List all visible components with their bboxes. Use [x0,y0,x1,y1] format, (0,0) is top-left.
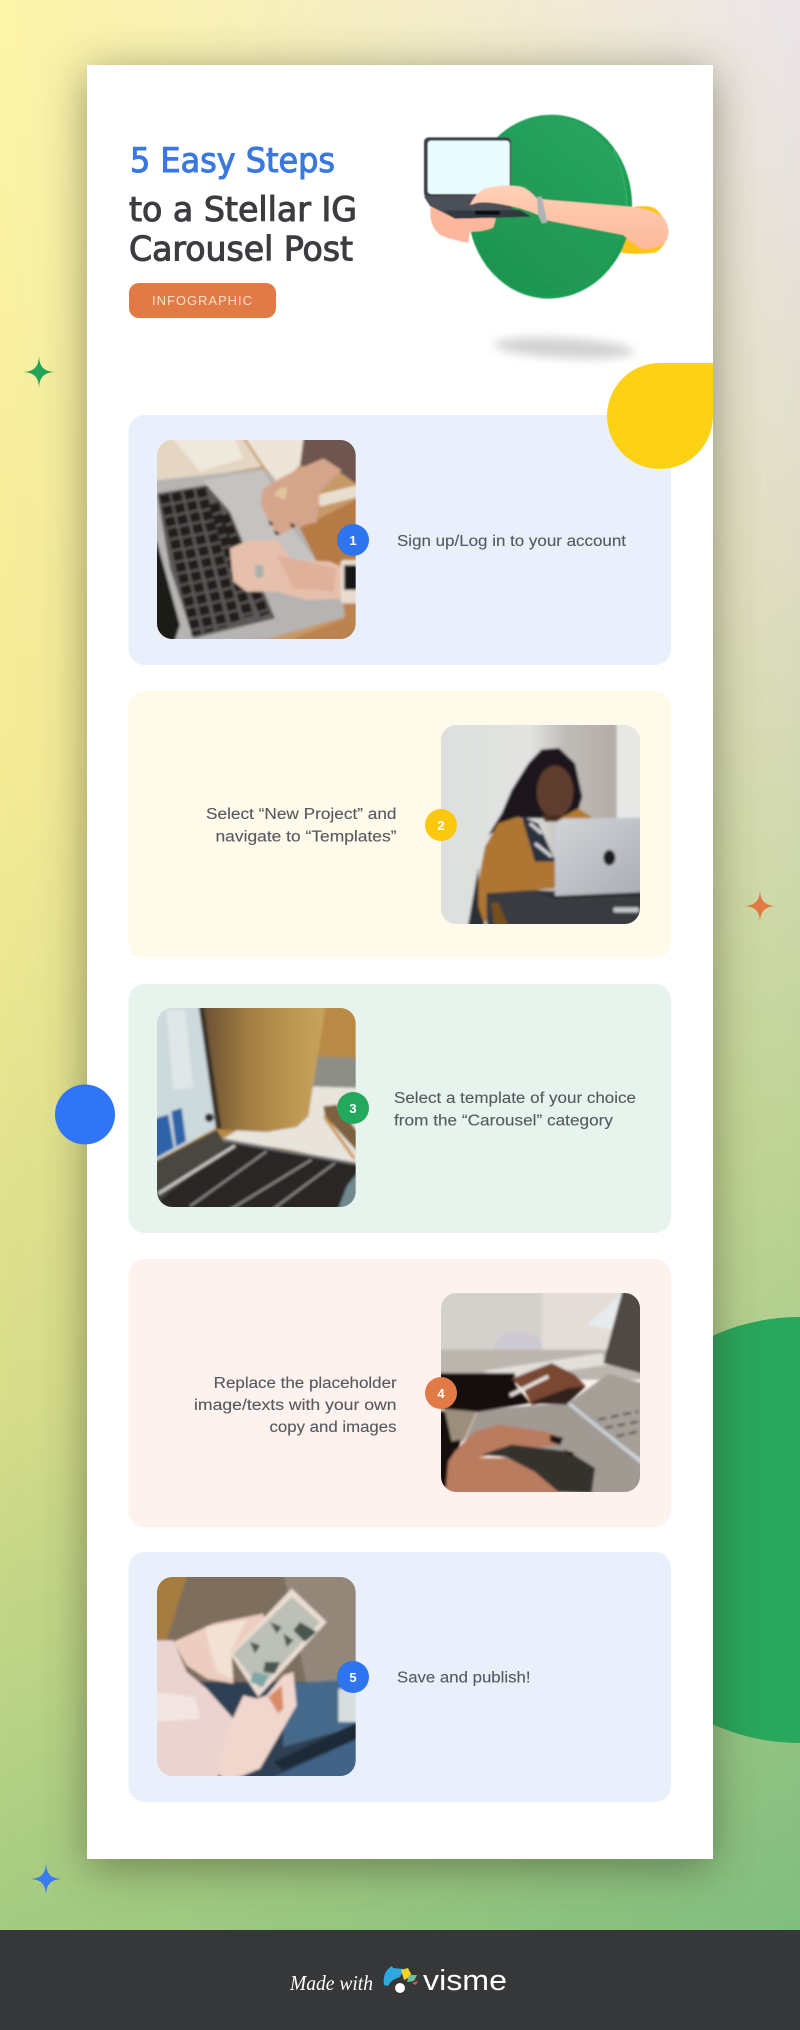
step text 3 [394,1090,636,1130]
card background [128,1259,671,1527]
step badge 3: 3 [349,1101,357,1116]
photo: coffee cup and laptop [157,1008,356,1207]
step text 4 [194,1375,397,1436]
card background [128,984,671,1233]
floating shadow [494,334,634,362]
white panel [87,65,713,1859]
panel: step 2 [128,691,671,958]
step text 3: from the “Carousel” category [394,1112,613,1130]
panel: step 3 [128,984,671,1233]
yellow drop shape [607,363,713,469]
visme wordmark: visme [423,1965,507,1997]
laptop screen [428,141,510,194]
sparkle: blue [30,1863,62,1895]
sparkle: green [23,356,55,388]
step badge 4: 4 [437,1386,445,1401]
step text 2: Select “New Project” and [206,806,396,823]
blue circle [55,1084,115,1144]
panel: step 1 [128,415,671,665]
photo: woman with laptop [441,725,640,924]
panel: step 4 [128,1259,671,1527]
badge: infographic [129,283,276,318]
title line 2: to a Stellar IG [129,190,357,229]
step badge 2 [425,809,457,841]
step text 3: Select a template of your choice [394,1090,636,1107]
footer bar [0,1930,800,2030]
step text 4: Replace the placeholder [214,1375,397,1392]
step badge 3 [337,1092,369,1124]
step text 4: copy and images [270,1419,397,1436]
card background [128,691,671,958]
step text 2 [206,806,396,846]
step badge 5 [337,1661,369,1693]
step text 5: Save and publish! [397,1670,530,1687]
bracelet [537,197,547,224]
photo: typing on laptop [157,440,356,639]
step text 4: image/texts with your own [194,1397,396,1414]
step badge 1: 1 [349,533,357,548]
laptop base [424,194,532,219]
title line 3: Carousel Post [129,230,353,268]
photo: hands on mouse and tablet [441,1293,640,1492]
illustration: hands holding laptop over green disk [424,109,669,362]
sparkle: orange [744,890,776,922]
step text 1: Sign up/Log in to your account [397,533,627,550]
card background [128,1552,671,1802]
made with label: Made with [289,1971,373,1995]
step text 2: navigate to “Templates” [216,828,396,846]
white panel shadow [87,72,713,1868]
lower hand [430,207,496,243]
hero figure [424,109,669,304]
green disk [462,109,638,304]
laptop lid [424,137,511,198]
card background [128,415,671,665]
photo: phone in hands [157,1577,356,1776]
panel: step 5 [128,1552,671,1802]
title line 1: 5 Easy Steps [130,141,335,180]
heading [129,141,357,268]
step badge 1 [337,524,369,556]
yellow sleeve [621,206,668,254]
icon: visme logo [384,1966,418,1993]
arm and hand [470,186,669,249]
step badge 2: 2 [437,818,445,833]
step badge 4 [425,1377,457,1409]
badge: infographic: INFOGRAPHIC [152,293,252,308]
step badge 5: 5 [349,1670,357,1685]
large green circle [587,1317,800,1743]
